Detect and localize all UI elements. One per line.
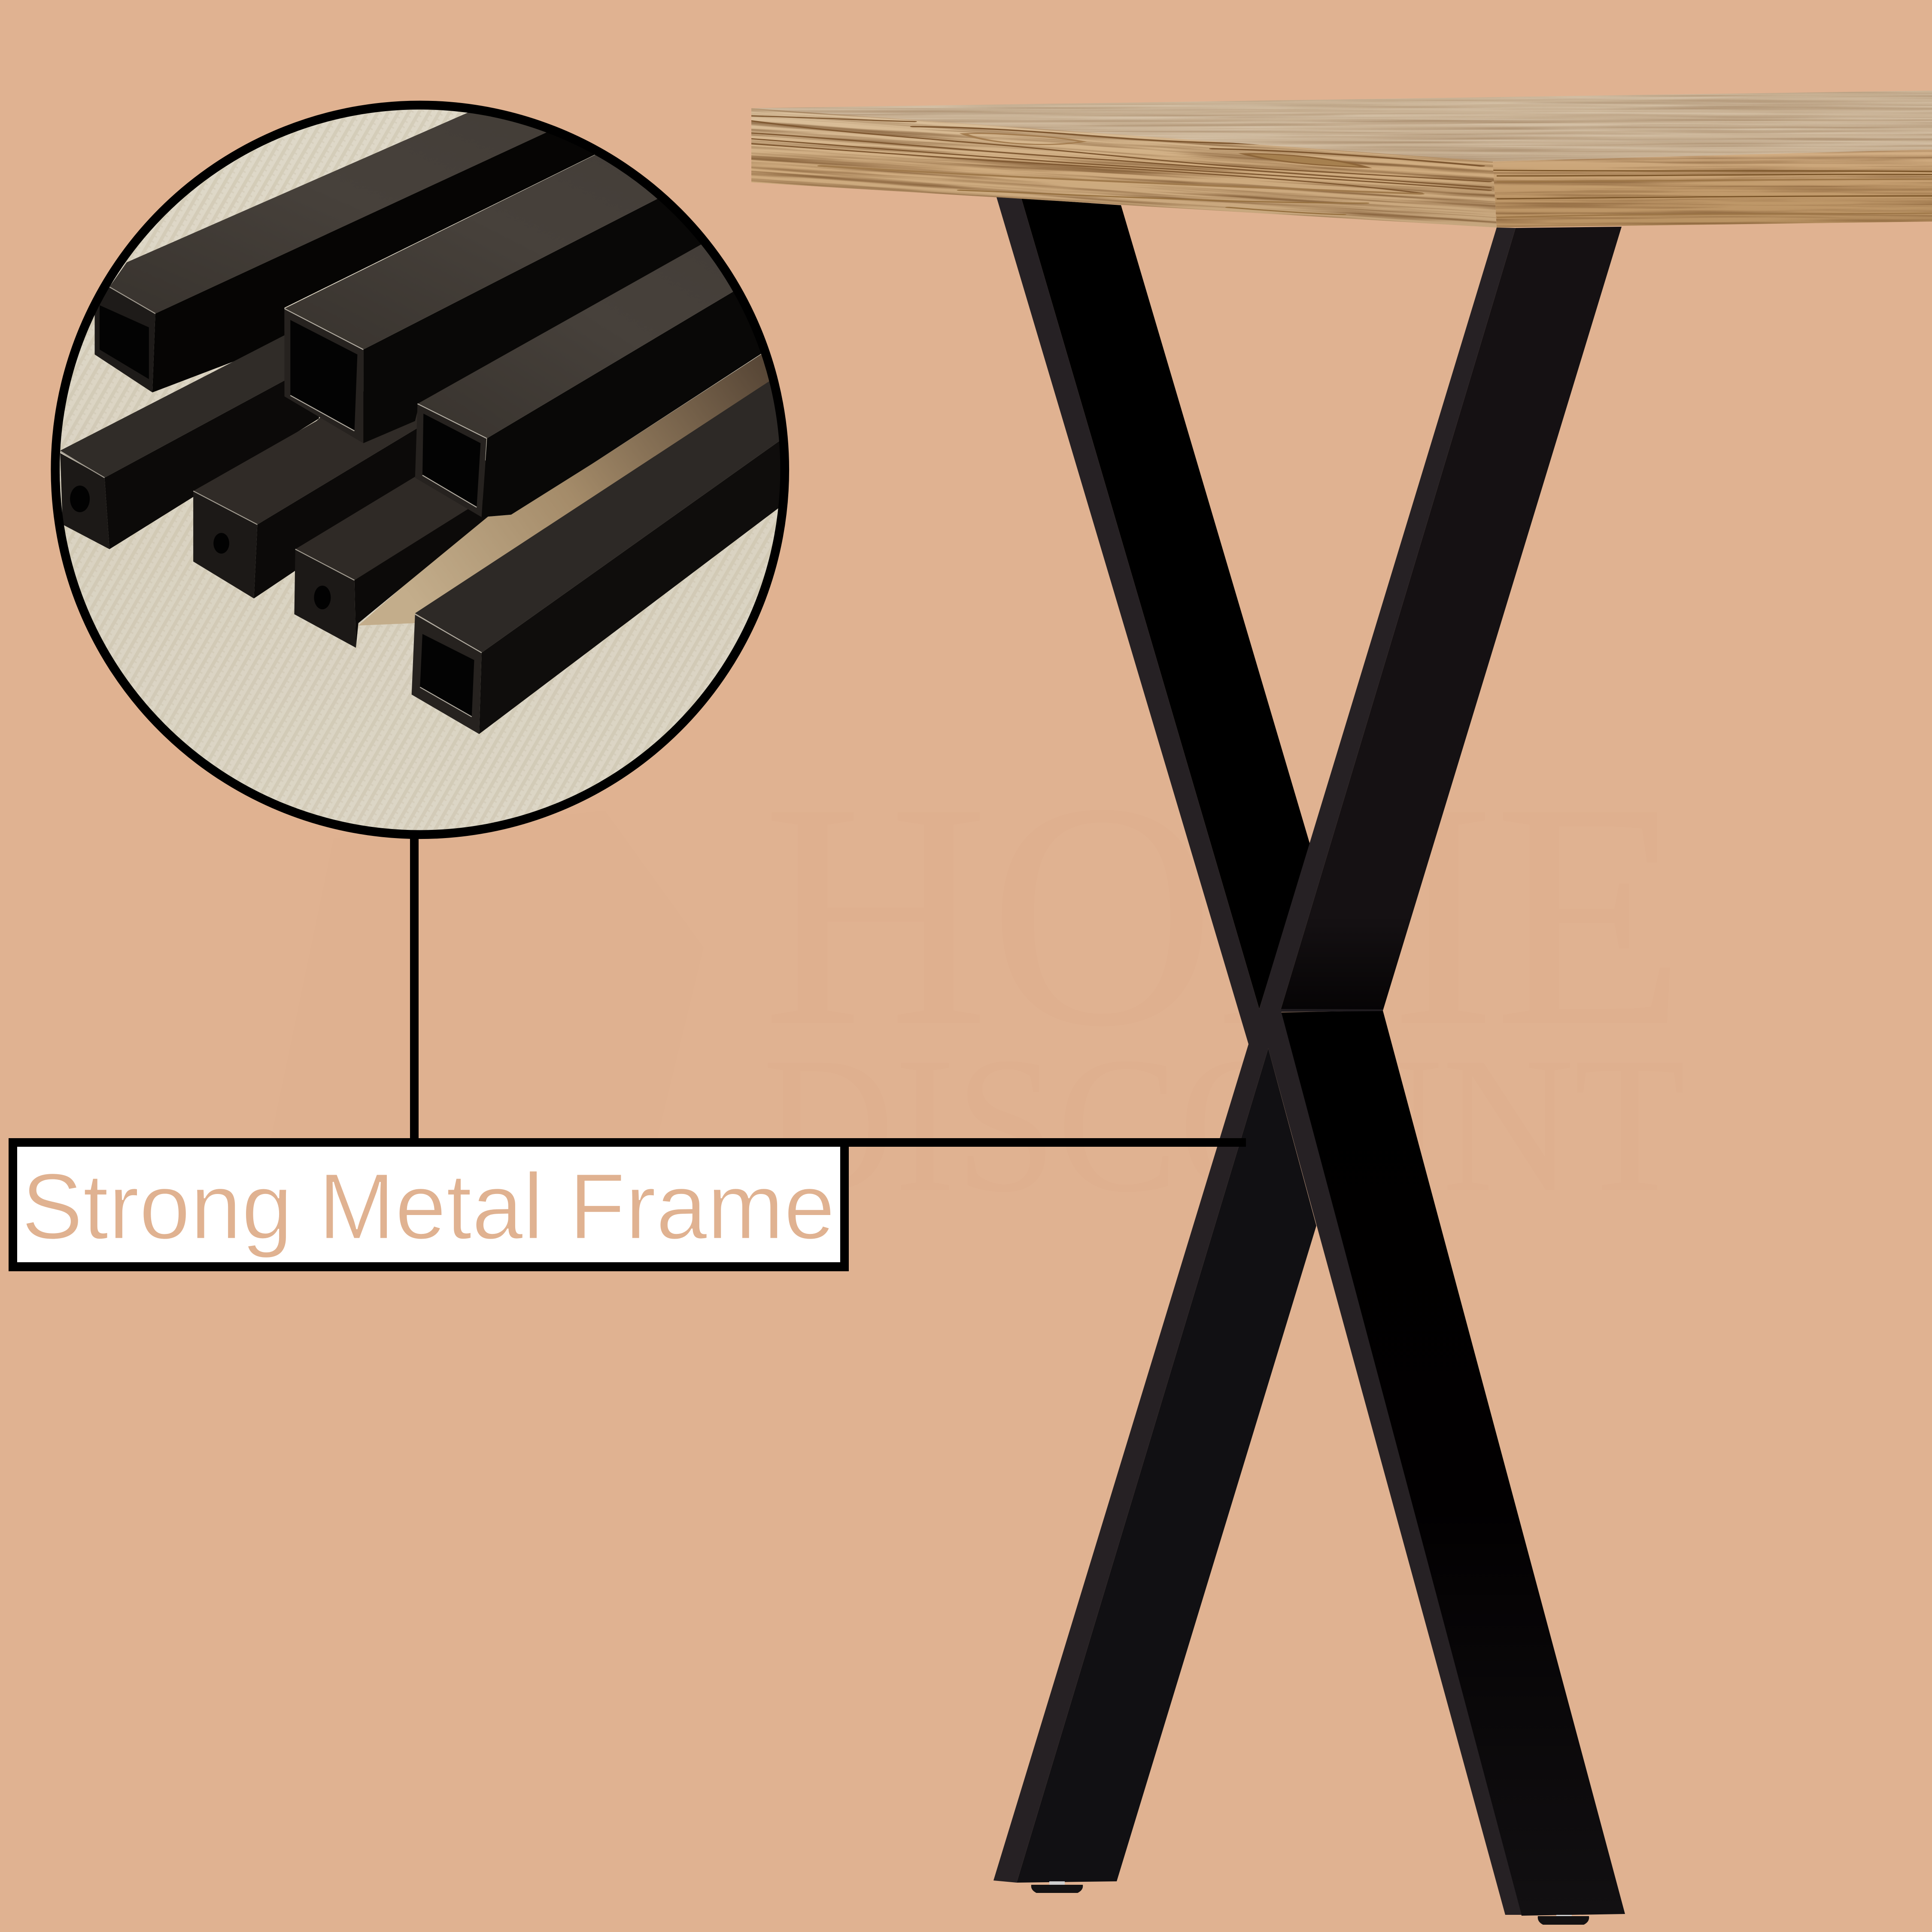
tube 4: centre solid tube [193, 392, 437, 598]
tube 3: front centre open tube [285, 62, 881, 443]
table front edge [1490, 146, 1932, 232]
foot: right leveller [1538, 1915, 1589, 1925]
label box border [9, 1138, 849, 1271]
table left edge [751, 108, 1497, 228]
vertical connector line [410, 829, 419, 1146]
table leg X frame [993, 197, 1625, 1925]
label box fill [17, 1147, 840, 1262]
leg: upper-left inner face [1021, 198, 1310, 1009]
watermark icon [258, 811, 704, 1202]
tube 6: right solid tube [294, 460, 496, 648]
circle outline [55, 105, 785, 835]
watermark word: DISCOUNT: DISCOUNT [762, 1017, 1686, 1232]
leg: weld seam [1281, 1009, 1383, 1012]
leg: lower-left inner face [1017, 1048, 1316, 1883]
tube 7: bottom right open tube [412, 308, 881, 734]
detail circle: metal tube close-up [51, 100, 789, 839]
tube 1: back open tube [95, 39, 782, 392]
table top surface [753, 91, 1932, 161]
leg: X front strips [993, 197, 1522, 1915]
foot: left leveller [1031, 1881, 1083, 1893]
table top [751, 91, 1932, 228]
tube 2: solid tube with hole [60, 318, 319, 549]
watermark word: HOME: HOME [762, 737, 1686, 1093]
callout label [9, 1138, 849, 1271]
cloth surface [60, 109, 779, 830]
tube photo clipped to circle [60, 109, 781, 830]
leg: lower-right inner face [1280, 1011, 1625, 1916]
label text: Strong Metal Frame [21, 1154, 835, 1259]
tan shadow band [358, 347, 778, 626]
callout line to leg [816, 1138, 1246, 1147]
tube 5: right open tube [415, 143, 881, 517]
leg: upper-right inner face [1281, 227, 1622, 1011]
watermark: home discount logo [258, 737, 1686, 1232]
